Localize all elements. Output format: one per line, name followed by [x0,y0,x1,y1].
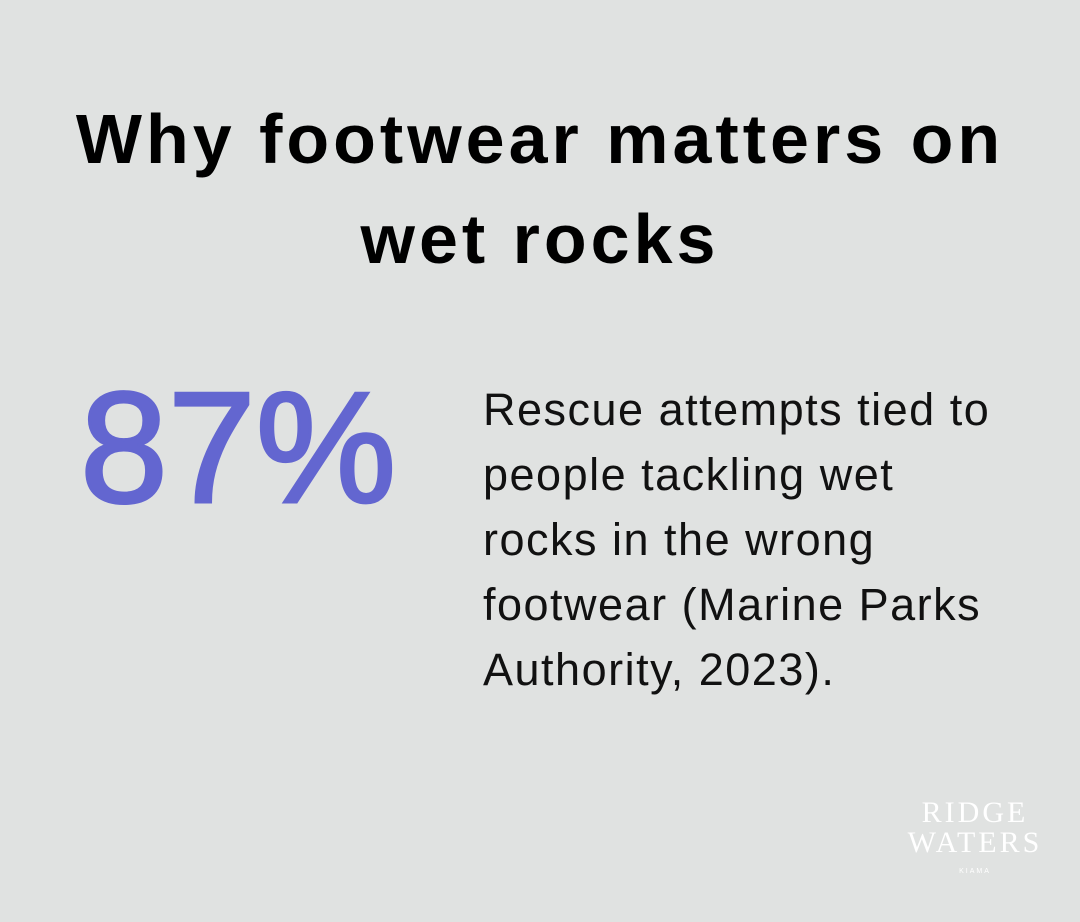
stat description: rocks in the wrong [483,514,875,565]
stat description: Rescue attempts tied to [483,384,990,435]
title: wet rocks [361,200,719,278]
stat description [483,384,990,695]
title: Why footwear matters on [76,100,1004,178]
stat description: Authority, 2023). [483,644,835,695]
logo: WATERS [908,826,1042,859]
title [76,100,1004,278]
logo [908,796,1042,875]
stat description: people tackling wet [483,449,894,500]
logo: KIAMA [959,868,991,875]
stat description: footwear (Marine Parks [483,579,981,630]
stat number: 87% [80,360,396,536]
logo: RIDGE [922,796,1028,829]
